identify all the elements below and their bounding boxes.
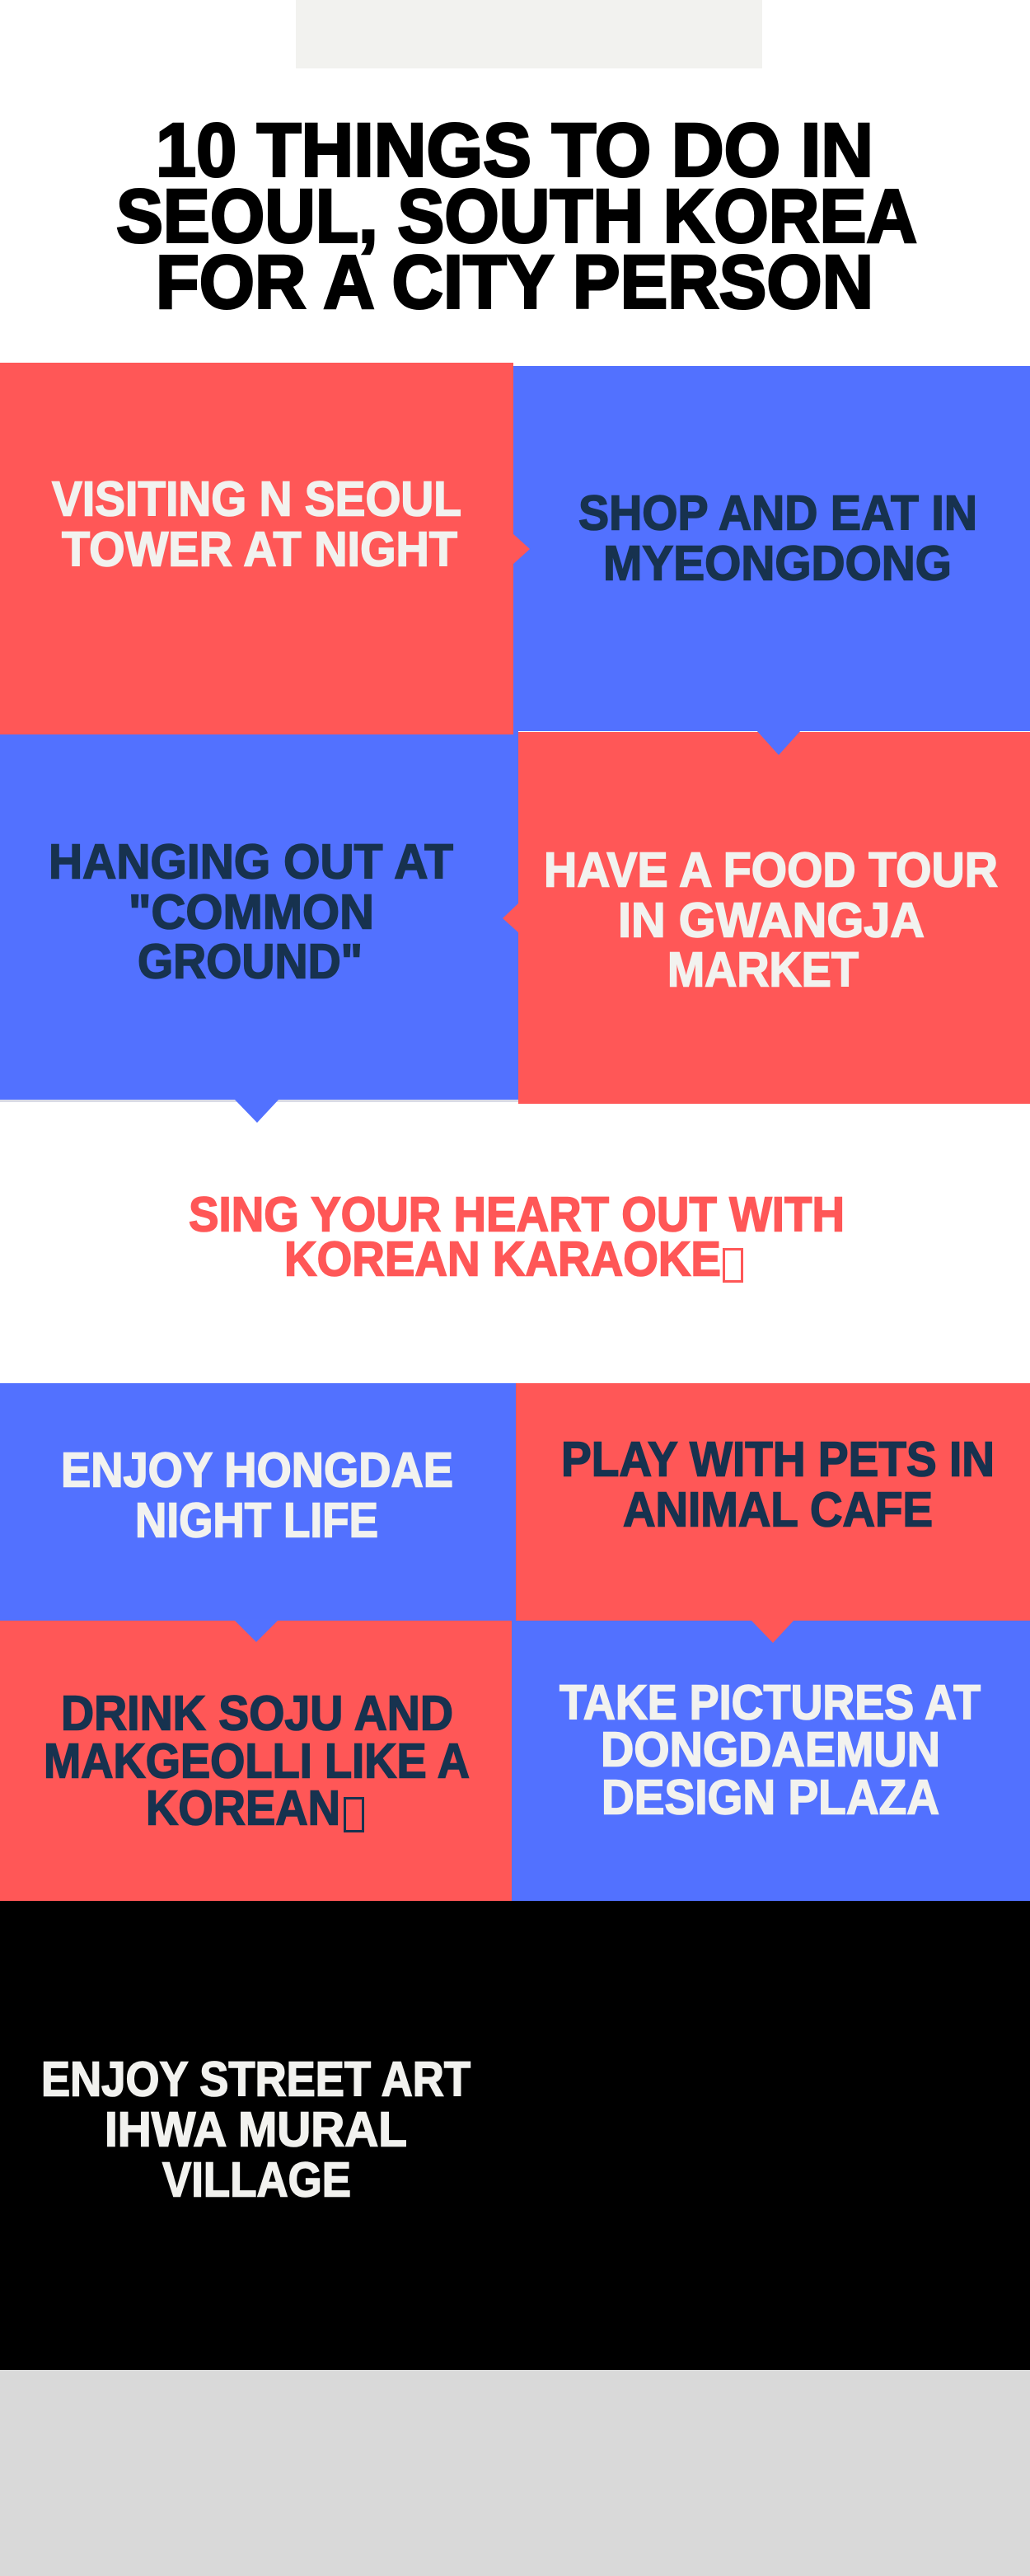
text: DDP: DONGDAEMUN xyxy=(601,1723,940,1777)
panel: animal cafe xyxy=(516,1383,1030,1621)
text: shop and eat xyxy=(578,486,977,590)
text: street art: IHWA MURAL xyxy=(105,2102,407,2156)
text: food tour: MARKET xyxy=(667,943,859,997)
arrow: down pointer xyxy=(751,1620,794,1643)
text: N Seoul Tower: VISITING N SEOUL xyxy=(52,472,461,526)
arrow: down pointer xyxy=(234,1620,279,1642)
text: Hongdae: ENJOY HONGDAE xyxy=(61,1443,453,1497)
text: Hongdae xyxy=(61,1443,453,1548)
text: DDP: DESIGN PLAZA xyxy=(602,1771,939,1825)
text: animal cafe: PLAY WITH PETS IN xyxy=(561,1433,995,1487)
footer band xyxy=(0,2370,1030,2576)
panel: soju and makgeolli xyxy=(0,1620,512,1901)
text: street art xyxy=(41,2053,471,2208)
icon: missing glyph box xyxy=(344,1799,363,1832)
text: Common Ground xyxy=(49,834,453,989)
top pale banner xyxy=(296,0,762,68)
text block: Korean karaoke xyxy=(189,1187,845,1286)
text: shop and eat: SHOP AND EAT IN xyxy=(578,486,977,541)
text: Hongdae: NIGHT LIFE xyxy=(135,1494,378,1548)
title: 10 THINGS TO DO IN xyxy=(156,109,873,193)
arrow: down pointer xyxy=(234,1099,279,1123)
text: soju: DRINK SOJU AND xyxy=(61,1687,453,1741)
arrow: down pointer from blue panel xyxy=(756,730,801,755)
text: soju: MAKGEOLLI LIKE A xyxy=(44,1734,470,1789)
text: soju: KOREAN xyxy=(146,1781,340,1835)
text: N Seoul Tower xyxy=(52,472,461,577)
title: FOR A CITY PERSON xyxy=(156,241,873,325)
panel: shop and eat in Myeongdong xyxy=(513,366,1030,731)
title xyxy=(116,109,917,325)
text: DDP: TAKE PICTURES AT xyxy=(559,1675,981,1729)
panel: Dongdaemun Design Plaza xyxy=(512,1620,1030,1901)
text: food tour xyxy=(544,842,998,997)
text: food tour: IN GWANGJA xyxy=(618,894,925,948)
panel: hanging out at Common Ground xyxy=(0,731,518,1123)
text: N Seoul Tower: TOWER AT NIGHT xyxy=(62,523,457,577)
title: SEOUL, SOUTH KOREA xyxy=(116,175,917,259)
text: soju xyxy=(44,1687,470,1835)
text block: Korean karaoke: SING YOUR HEART OUT WITH xyxy=(189,1187,845,1241)
icon: missing glyph box xyxy=(723,1250,742,1281)
text: shop and eat: MYEONGDONG xyxy=(603,536,952,590)
text block: Korean karaoke: KOREAN KARAOKE xyxy=(284,1232,721,1286)
text: Common Ground: GROUND" xyxy=(138,935,363,989)
text: Common Ground: "COMMON xyxy=(129,885,374,940)
panel: Hongdae night life xyxy=(0,1383,516,1621)
panel: food tour in Gwangja Market xyxy=(503,730,1030,1104)
panel: visiting N Seoul Tower xyxy=(0,363,530,734)
text: DDP xyxy=(559,1675,981,1825)
text: food tour: HAVE A FOOD TOUR xyxy=(544,842,998,897)
text: animal cafe: ANIMAL CAFE xyxy=(623,1482,933,1537)
arrow: left pointer xyxy=(503,903,519,933)
text: animal cafe xyxy=(561,1433,995,1537)
arrow: right pointer xyxy=(513,533,530,565)
panel: Ihwa Mural Village xyxy=(0,1901,1030,2370)
text: street art: VILLAGE xyxy=(162,2153,351,2208)
text: street art: ENJOY STREET ART xyxy=(41,2053,471,2107)
text: Common Ground: HANGING OUT AT xyxy=(49,834,453,889)
